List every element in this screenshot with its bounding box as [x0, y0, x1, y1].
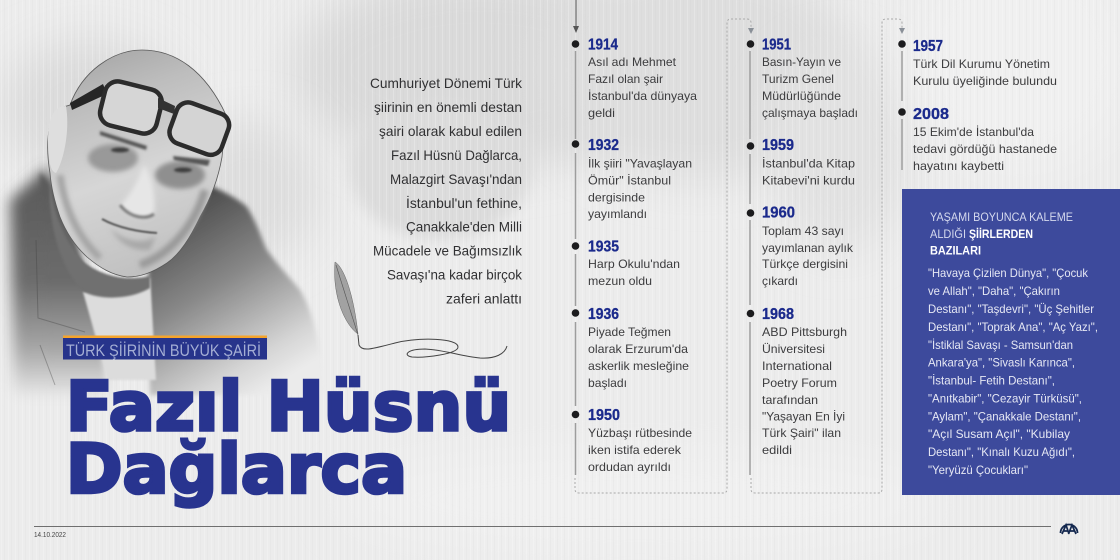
- timeline connectors: [575, 19, 902, 493]
- timeline 1968: [762, 306, 847, 457]
- poem list: Ankara'ya", "Sivaslı Karınca",: [928, 356, 1075, 370]
- timeline 1950: iken istifa ederek: [588, 443, 682, 457]
- timeline 1951: 1951: [762, 36, 791, 54]
- timeline 1914: İstanbul'da dünyaya: [588, 89, 697, 103]
- icon: feather and pen flourish: [335, 262, 507, 358]
- timeline 1968: ABD Pittsburgh: [762, 325, 847, 339]
- timeline 1951: çalışmaya başladı: [762, 106, 858, 120]
- poem list: "Yeryüzü Çocukları": [928, 463, 1028, 477]
- timeline dots: [572, 40, 906, 418]
- subtitle label: TÜRK ŞİİRİNİN BÜYÜK ŞAİRİ: [66, 341, 261, 360]
- timeline 1960: yayımlanan aylık: [762, 241, 854, 255]
- timeline 2008: hayatını kaybetti: [913, 159, 1004, 173]
- timeline 1960: 1960: [762, 204, 795, 222]
- panel: poems: [902, 189, 1120, 495]
- timeline 1950: ordudan ayrıldı: [588, 460, 671, 474]
- poem list: "Açıl Susam Açıl", "Kubilay: [928, 427, 1070, 441]
- timeline 1914: geldi: [588, 106, 615, 120]
- face shading: [60, 131, 210, 265]
- timeline 1957: Kurulu üyeliğinde bulundu: [913, 74, 1057, 88]
- shirt: [83, 278, 156, 380]
- head: [48, 50, 226, 277]
- sweater collar: [49, 172, 150, 298]
- main title: Dağlarca: [66, 430, 407, 510]
- timeline 1935: 1935: [588, 238, 619, 256]
- timeline 1968: "Yaşayan En İyi: [762, 410, 845, 424]
- timeline 1957: Türk Dil Kurumu Yönetim: [913, 57, 1050, 71]
- timeline 1936: askerlik mesleğine: [588, 359, 689, 373]
- timeline 1968: International: [762, 359, 832, 373]
- timeline 1951: Turizm Genel: [762, 72, 834, 86]
- timeline 1960: Toplam 43 sayı: [762, 224, 844, 238]
- timeline 1932: 1932: [588, 137, 619, 154]
- timeline 1959: Kitabevi'ni kurdu: [762, 174, 855, 188]
- timeline 1951: Basın-Yayın ve: [762, 55, 841, 69]
- poem list: "Havaya Çizilen Dünya", "Çocuk: [928, 266, 1089, 280]
- timeline 1951: Müdürlüğünde: [762, 89, 841, 103]
- timeline 1959: İstanbul'da Kitap: [762, 156, 855, 170]
- timeline 1935: Harp Okulu'ndan: [588, 257, 680, 271]
- arrows into timeline columns: [573, 0, 905, 34]
- panel heading: ALDIĞI: [930, 226, 966, 241]
- timeline 1960: Türkçe dergisini: [762, 257, 848, 271]
- footer rule: [34, 526, 1051, 528]
- timeline 1950: [588, 407, 692, 474]
- poem list: "Anıtkabir", "Cezayir Türküsü",: [928, 392, 1082, 406]
- timeline 1957: 1957: [913, 38, 943, 55]
- timeline 2008: 15 Ekim'de İstanbul'da: [913, 125, 1034, 139]
- timeline 1914: Fazıl olan şair: [588, 72, 663, 86]
- timeline 1936: Piyade Teğmen: [588, 325, 671, 339]
- timeline 1968: tarafından: [762, 393, 818, 407]
- icon: AA logo: [1060, 524, 1078, 534]
- timeline 2008: 2008: [913, 106, 949, 123]
- timeline 1914: 1914: [588, 36, 618, 54]
- main title: Fazıl Hüsnü: [66, 368, 511, 447]
- poem list: "İstanbul- Fetih Destanı",: [928, 374, 1055, 388]
- timeline 1957: [913, 38, 1057, 88]
- glasses: [70, 79, 232, 158]
- intro paragraph: Savaşı'na kadar birçok: [387, 266, 523, 282]
- timeline 2008: [913, 106, 1057, 173]
- poem list: Destanı", "Toprak Ana", "Aç Yazı",: [928, 320, 1098, 334]
- timeline 1914: [588, 36, 697, 120]
- intro paragraph: Fazıl Hüsnü Dağlarca,: [391, 147, 522, 163]
- timeline 1936: olarak Erzurum'da: [588, 342, 688, 356]
- timeline 1968: Poetry Forum: [762, 376, 837, 390]
- timeline 1914: Asıl adı Mehmet: [588, 55, 677, 69]
- panel heading: YAŞAMI BOYUNCA KALEME: [930, 210, 1073, 224]
- panel heading: [930, 210, 1073, 258]
- poem list: "İstiklal Savaşı - Samsun'dan: [928, 338, 1073, 352]
- timeline 1968: Üniversitesi: [762, 342, 825, 356]
- main title: [66, 368, 511, 510]
- panel heading: BAZILARI: [930, 244, 981, 258]
- intro paragraph: zaferi anlattı: [446, 290, 522, 306]
- intro paragraph: Cumhuriyet Dönemi Türk: [370, 75, 523, 91]
- timeline 1932: dergisinde: [588, 190, 645, 204]
- timeline 1951: [762, 36, 858, 120]
- jacket: [10, 167, 325, 395]
- intro paragraph: Çanakkale'den Milli: [406, 218, 522, 234]
- timeline 1968: 1968: [762, 306, 794, 323]
- panel heading: ŞİİRLERDEN: [969, 226, 1033, 241]
- timeline 1935: [588, 238, 680, 288]
- intro paragraph: şiirinin en önemli destan: [374, 99, 522, 115]
- timeline 1960: [762, 204, 854, 288]
- intro paragraph: [370, 75, 523, 306]
- timeline 1950: 1950: [588, 407, 620, 424]
- timeline 1932: Ömür" İstanbul: [588, 174, 671, 188]
- timeline 1959: 1959: [762, 137, 794, 154]
- timeline 1950: Yüzbaşı rütbesinde: [588, 426, 692, 440]
- poem list: [928, 266, 1098, 477]
- date: 14.10.2022: [34, 530, 66, 539]
- poem list: Destanı", "Taşdevri", "Üç Şehitler: [928, 302, 1094, 316]
- timeline 1935: mezun oldu: [588, 274, 652, 288]
- portrait of the poet: [10, 50, 325, 395]
- timeline 1932: [588, 137, 692, 221]
- poem list: ve Allah", "Daha", "Çakırın: [928, 284, 1060, 298]
- intro paragraph: İstanbul'un fethine,: [406, 194, 522, 211]
- timeline 2008: tedavi gördüğü hastanede: [913, 142, 1057, 156]
- timeline rails: [576, 51, 902, 475]
- intro paragraph: şairi olarak kabul edilen: [379, 123, 522, 139]
- lapel line: [36, 240, 85, 385]
- intro paragraph: Mücadele ve Bağımsızlık: [373, 242, 523, 258]
- subtitle label: [63, 336, 267, 360]
- timeline 1968: edildi: [762, 443, 792, 457]
- timeline 1936: başladı: [588, 376, 627, 390]
- timeline 1968: Türk Şairi" ilan: [762, 426, 841, 440]
- timeline 1960: çıkardı: [762, 274, 798, 288]
- timeline 1936: [588, 306, 689, 390]
- poem list: "Aylam", "Çanakkale Destanı",: [928, 410, 1081, 424]
- timeline 1932: yayımlandı: [588, 207, 647, 221]
- timeline 1936: 1936: [588, 306, 619, 323]
- intro paragraph: Malazgirt Savaşı'ndan: [390, 171, 522, 187]
- timeline 1959: [762, 137, 855, 188]
- poem list: Destanı", "Kınalı Kuzu Ağıdı",: [928, 445, 1075, 459]
- timeline 1932: İlk şiiri "Yavaşlayan: [588, 156, 692, 170]
- ear: [48, 106, 67, 173]
